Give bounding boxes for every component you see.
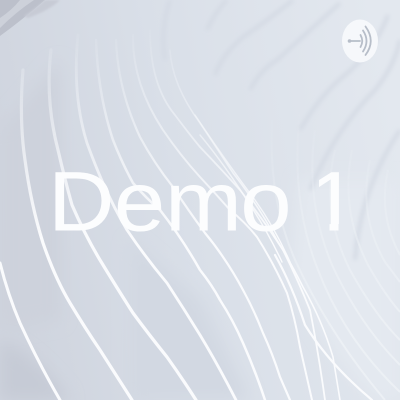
title: Demo 1 xyxy=(48,154,359,249)
icon: podcast badge xyxy=(342,20,378,62)
faint dark ribbons, top right xyxy=(163,0,400,260)
top-left dark wisp xyxy=(0,0,60,36)
faint white lines, right side xyxy=(272,110,400,400)
